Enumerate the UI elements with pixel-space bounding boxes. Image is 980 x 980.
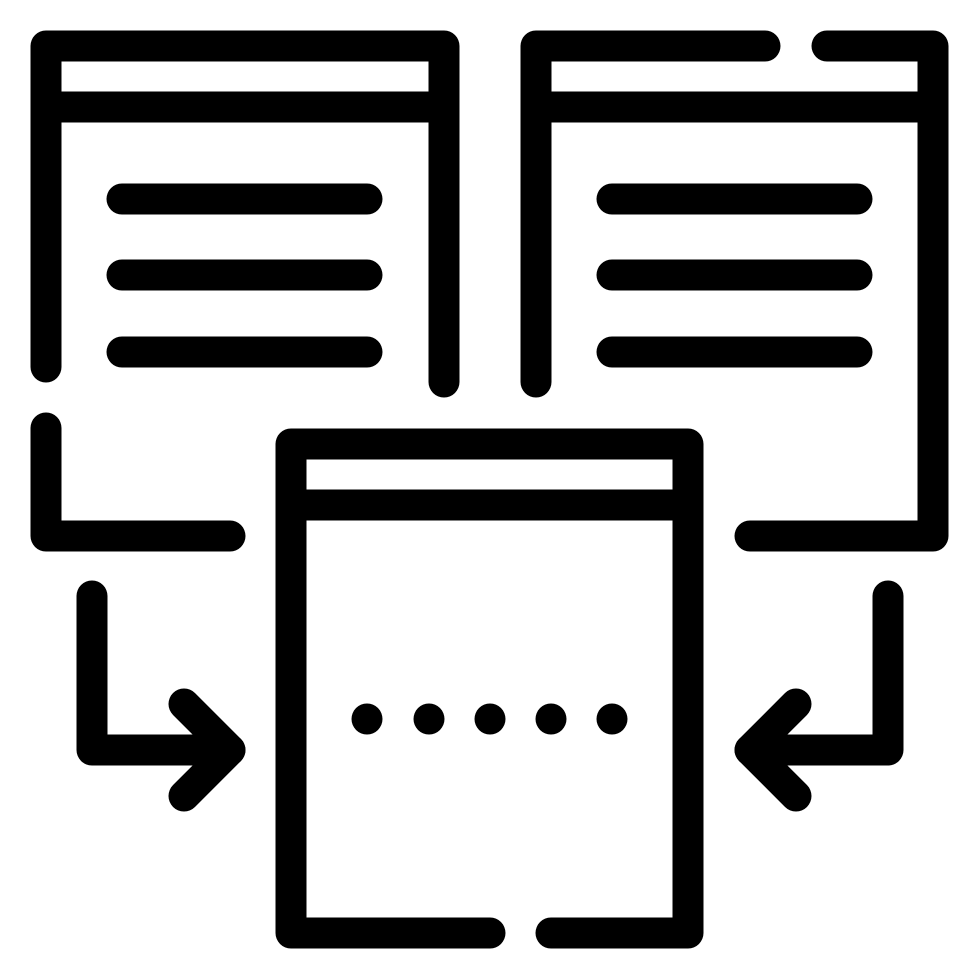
arrow: left into merged document <box>92 596 230 796</box>
right document text lines <box>612 199 857 352</box>
merged document <box>291 444 688 933</box>
left document <box>46 46 444 536</box>
merged document dots <box>352 704 628 734</box>
merged document outline left <box>291 444 688 933</box>
right document header bar <box>536 92 933 122</box>
arrow: right into merged document <box>750 596 888 796</box>
right document outline <box>536 46 765 382</box>
right document <box>536 46 933 536</box>
left document outline <box>46 46 444 382</box>
merged document header bar <box>291 490 688 520</box>
left document text lines <box>122 199 367 352</box>
left document lower corner <box>46 428 230 536</box>
right document top right and side <box>750 46 933 536</box>
left document header bar <box>46 92 444 122</box>
